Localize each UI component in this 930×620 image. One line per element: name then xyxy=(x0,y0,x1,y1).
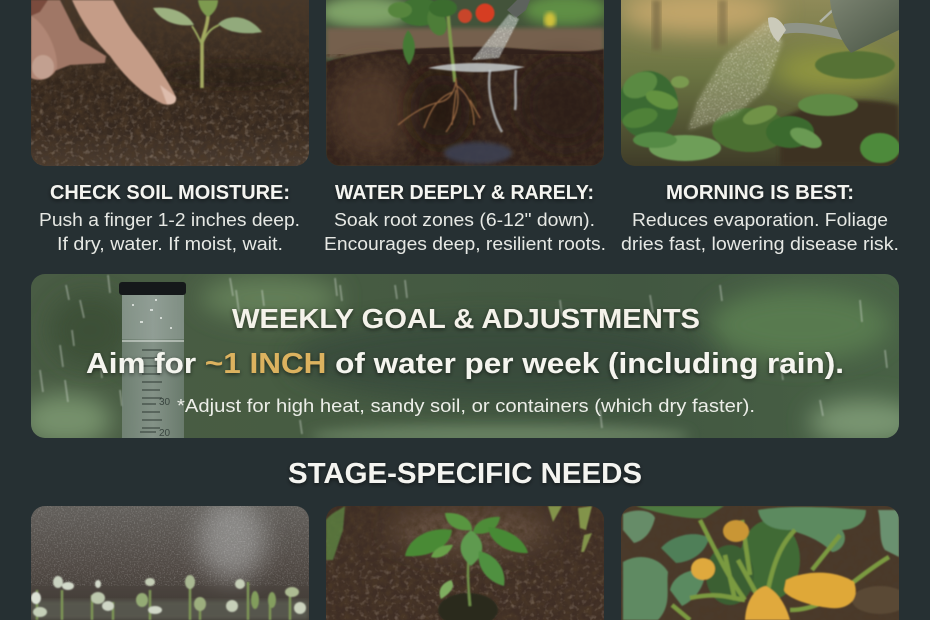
text: banner heading: WEEKLY GOAL & ADJUSTMENTS xyxy=(232,303,700,334)
heading block: check soil moisture: CHECK SOIL MOISTURE: xyxy=(50,182,290,204)
icon: pepper seedling xyxy=(405,513,528,620)
panel: check soil moisture photo xyxy=(31,0,309,166)
text: adjustment note: *Adjust for high heat, sandy soil, or containers (which dry faster). xyxy=(177,395,755,416)
heading block: water deeply: Soak root zones (6-12" down). xyxy=(334,209,595,230)
heading: stage-specific needs: STAGE-SPECIFIC NEEDS xyxy=(288,458,642,490)
icon: foliage rows xyxy=(618,51,900,163)
heading block: check soil moisture xyxy=(39,182,300,254)
heading block: morning is best: Reduces evaporation. Foliage xyxy=(632,209,888,230)
panel: seedling stage photo xyxy=(31,500,309,620)
heading block: morning is best xyxy=(621,182,899,254)
panel: young plant stage photo xyxy=(326,506,604,620)
panel: morning is best photo xyxy=(618,0,900,166)
heading block: check soil moisture: If dry, water. If moist, wait. xyxy=(57,233,283,254)
heading block: water deeply xyxy=(324,182,606,254)
heading block: water deeply: WATER DEEPLY & RARELY: xyxy=(335,182,594,204)
heading block: check soil moisture: Push a finger 1-2 inches deep. xyxy=(39,209,300,230)
icon: seedling row xyxy=(31,575,306,620)
icon: tomato plant with roots xyxy=(388,0,494,132)
text: weekly goal statement: Aim for ~1 INCH of water per week (including rain). xyxy=(86,348,844,380)
icon: rain gauge xyxy=(119,282,186,448)
panel: mature squash stage photo xyxy=(621,506,908,620)
icon: watering can with spray xyxy=(688,0,899,130)
heading block: morning is best: dries fast, lowering disease risk. xyxy=(621,233,899,254)
icon: rain streaks xyxy=(40,275,887,434)
icon: hand pressing finger into soil xyxy=(31,0,176,105)
icon: squash leaves and fruit xyxy=(623,506,908,620)
panel: weekly goal banner xyxy=(20,274,921,448)
icon: hose and water stream xyxy=(428,0,530,164)
heading block: water deeply: Encourages deep, resilient roots. xyxy=(324,233,606,254)
heading block: morning is best: MORNING IS BEST: xyxy=(666,182,854,204)
icon: seedling xyxy=(153,0,262,88)
icon: rain gauge: 30 xyxy=(159,397,171,408)
icon: rain gauge: 20 xyxy=(159,428,171,439)
panel: water deeply photo xyxy=(320,0,609,166)
